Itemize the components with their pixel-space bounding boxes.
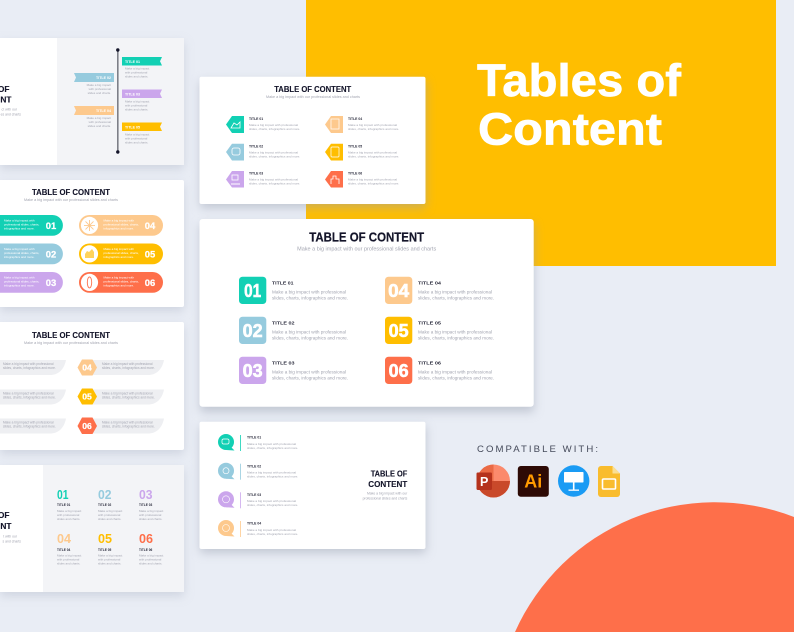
hexagon item 05: slides, charts, infographics and more.: [102, 396, 155, 400]
square item 04: slides, charts, infographics and more.: [418, 296, 494, 300]
hexagon item 04: slides, charts, infographics and more.: [102, 366, 155, 370]
square item 02: 02: [243, 321, 263, 341]
panel: pill slide: [0, 180, 184, 311]
pill 02: infographics and more.: [4, 255, 35, 259]
pill 04: [79, 215, 163, 236]
pill 05: Make a big impact with: [104, 247, 134, 251]
timeline item 04: with professional: [89, 120, 111, 124]
bubble item 03: slides, charts, infographics and more.: [247, 503, 298, 507]
pill 05: 05: [145, 248, 155, 260]
timeline item 04: TITLE 04: [96, 109, 111, 113]
pill 06: professional slides, charts,: [104, 280, 139, 284]
grid item 02: Make a big impact: [98, 509, 123, 513]
slide subtitle: Make a big impact with our professional slides and charts: [24, 198, 118, 202]
grid item 04: Make a big impact: [57, 554, 82, 558]
pill 05: professional slides, charts,: [104, 251, 139, 255]
slide title: CONTENT: [368, 479, 408, 489]
left bars: slides, charts, infographics and more.: [3, 396, 56, 400]
timeline item 01: [122, 57, 162, 78]
grid item 06: Make a big impact: [139, 554, 164, 558]
square item 05: 05: [389, 321, 409, 341]
compatible with label: COMPATIBLE WITH:: [477, 444, 598, 455]
timeline item 01: TITLE 01: [125, 60, 140, 64]
timeline item 04: [74, 106, 114, 128]
icon: Google Slides: [598, 466, 620, 497]
square item 06: [385, 357, 494, 384]
tag item 02: Make a big impact with professional: [249, 150, 298, 154]
panel: arrow tag slide: [200, 77, 426, 208]
slide title: TABLE OF CONTENT: [32, 330, 111, 340]
timeline item 03: with professional: [125, 104, 148, 108]
square item 06: TITLE 06: [418, 360, 441, 366]
tag item 04: TITLE 04: [348, 117, 362, 121]
slide subtitle: Make a big impact with our professional slides and charts: [297, 246, 437, 252]
left bars: Make a big impact with professional: [3, 362, 54, 366]
panel: speech bubble slide: [200, 422, 426, 553]
icon: Keynote: [558, 465, 589, 497]
slide subtitle: t with our: [3, 534, 18, 538]
hexagon item 06: [78, 418, 164, 434]
square item 06: slides, charts, infographics and more.: [418, 376, 494, 380]
slide subtitle: s and charts: [3, 540, 21, 544]
square item 03: Make a big impact with professional: [272, 369, 346, 374]
hexagon item 04: Make a big impact with professional: [102, 362, 153, 366]
square item 05: slides, charts, infographics and more.: [418, 336, 494, 340]
grid item 01: TITLE 01: [57, 503, 71, 507]
icon: Illustrator: [518, 466, 549, 497]
pill 03: infographics and more.: [4, 284, 35, 288]
grid item 03: TITLE 03: [139, 503, 153, 507]
tag item 03: slides, charts, infographics and more.: [249, 182, 300, 186]
grid item 06: [139, 531, 164, 566]
slide title: [368, 468, 408, 489]
yellow header block: [306, 0, 776, 266]
timeline item 02: Make a big impact: [87, 83, 111, 87]
square item 01: slides, charts, infographics and more.: [272, 296, 348, 300]
slide title: TABLE OF CONTENT: [274, 84, 352, 94]
pill 06: infographics and more.: [104, 284, 134, 288]
pill 05: [79, 244, 163, 264]
slide subtitle: Make a big impact with our professional slides and charts: [24, 341, 118, 345]
square item 05: Make a big impact with professional: [418, 329, 492, 334]
pill 02: Make a big impact with: [4, 247, 35, 251]
pill 06: Make a big impact with: [104, 276, 134, 280]
tag item 06: TITLE 06: [348, 172, 362, 176]
orange corner circle: [515, 502, 794, 632]
slide title: TABLE OF CONTENT: [32, 187, 111, 197]
square item 01: TITLE 01: [272, 280, 294, 286]
hexagon item 05: Make a big impact with professional: [102, 392, 153, 396]
icon: PowerPoint: [476, 464, 510, 498]
icon: PowerPoint: P: [480, 475, 488, 489]
tag item 02: TITLE 02: [249, 144, 263, 148]
slide title: [0, 84, 12, 104]
pill 01: [0, 215, 63, 236]
grid item 05: TITLE 05: [98, 548, 112, 552]
tag item 03: Make a big impact with professional: [249, 178, 298, 182]
square item 05: TITLE 05: [418, 320, 441, 326]
timeline item 02: with professional: [89, 87, 111, 91]
icon: Illustrator: Ai: [524, 472, 542, 492]
timeline item 02: [74, 73, 114, 95]
square item 02: TITLE 02: [272, 320, 295, 326]
grid item 04: TITLE 04: [57, 548, 71, 552]
hexagon item 06: slides, charts, infographics and more.: [102, 424, 155, 428]
grid item 05: slides and charts.: [98, 562, 122, 566]
grid item 03: with professional: [139, 513, 162, 517]
timeline item 03: [122, 90, 162, 112]
hexagon item 05: [78, 388, 164, 404]
left bars: slides, charts, infographics and more.: [3, 366, 56, 370]
slide title: NT: [0, 94, 12, 104]
grid item 02: TITLE 02: [98, 503, 112, 507]
grid item 02: 02: [98, 487, 112, 502]
grid item 01: [57, 487, 82, 521]
square item 01: 01: [244, 281, 261, 301]
square item 03: 03: [243, 361, 263, 381]
bubble item 02: Make a big impact with professional: [247, 470, 296, 474]
tag item 06: slides, charts, infographics and more.: [348, 182, 399, 186]
grid item 04: slides and charts.: [57, 562, 81, 566]
hexagon item 06: 06: [82, 421, 92, 431]
pill 04: infographics and more.: [104, 226, 134, 230]
timeline item 03: slides and charts.: [125, 108, 149, 112]
slide title: TABLE OF: [371, 468, 407, 478]
square item 04: Make a big impact with professional: [418, 289, 492, 294]
bubble item 01: [218, 434, 298, 451]
panel: numbers grid slide: [0, 465, 184, 596]
timeline axis: [116, 48, 120, 154]
bubble item 02: TITLE 02: [247, 464, 261, 468]
tag item 02: [226, 144, 300, 160]
pill 01: 01: [46, 220, 56, 231]
slide subtitle: Make a big impact with our professional slides and charts: [266, 95, 360, 99]
pill 02: [0, 244, 63, 264]
grid item 01: 01: [57, 487, 68, 502]
grid item 06: with professional: [139, 558, 162, 562]
grid item 05: Make a big impact: [98, 554, 123, 558]
left bars: slides, charts, infographics and more.: [3, 424, 56, 428]
grid item 02: [98, 487, 123, 521]
timeline item 05: slides and charts.: [125, 140, 149, 144]
pill 03: Make a big impact with: [4, 276, 35, 280]
tag item 01: TITLE 01: [249, 117, 263, 121]
slide subtitle: ct with our: [2, 108, 18, 112]
bubble item 04: Make a big impact with professional: [247, 528, 296, 532]
tag item 03: TITLE 03: [249, 172, 263, 176]
hexagon item 06: Make a big impact with professional: [102, 420, 153, 424]
grid item 04: [57, 531, 82, 566]
pill 04: professional slides, charts,: [104, 222, 139, 226]
slide title: NT: [0, 521, 12, 531]
square item 02: [239, 317, 348, 344]
grid item 05: with professional: [98, 558, 121, 562]
bubble item 04: slides, charts, infographics and more.: [247, 532, 298, 536]
main heading: Content: [478, 104, 662, 154]
tag item 01: Make a big impact with professional: [249, 123, 298, 127]
grid item 06: TITLE 06: [139, 548, 153, 552]
grid item 05: 05: [98, 531, 112, 546]
pill 01: Make a big impact with: [4, 218, 35, 222]
bubble item 03: TITLE 03: [247, 493, 261, 497]
bubble item 02: [218, 463, 298, 480]
pill 02: 02: [46, 248, 56, 260]
bubble item 03: Make a big impact with professional: [247, 499, 296, 503]
bubble item 03: [218, 491, 298, 508]
square item 01: [239, 277, 348, 304]
left bars: [0, 360, 66, 434]
timeline item 01: with professional: [125, 70, 148, 74]
square item 03: slides, charts, infographics and more.: [272, 376, 348, 380]
bubble item 04: TITLE 04: [247, 522, 261, 526]
pill 06: [79, 272, 163, 293]
left bars: Make a big impact with professional: [3, 392, 54, 396]
tag item 04: slides, charts, infographics and more.: [348, 127, 399, 131]
tag item 05: slides, charts, infographics and more.: [348, 154, 399, 158]
grid item 05: [98, 531, 123, 566]
slide subtitle: [363, 492, 408, 500]
slide title: [0, 510, 12, 531]
grid item 01: Make a big impact: [57, 509, 82, 513]
timeline item 02: slides and charts.: [88, 91, 111, 95]
panel: timeline slide: [0, 38, 184, 169]
bubble item 02: slides, charts, infographics and more.: [247, 474, 298, 478]
timeline item 05: [122, 122, 162, 144]
tag item 01: [226, 116, 300, 133]
tag item 02: slides, charts, infographics and more.: [249, 154, 300, 158]
grid item 01: slides and charts.: [57, 517, 81, 521]
pill 03: [0, 272, 63, 293]
grid item 02: slides and charts.: [98, 517, 122, 521]
tag item 04: [325, 116, 399, 133]
tag item 06: [325, 171, 399, 188]
square item 06: 06: [389, 361, 409, 381]
tag item 01: slides, charts, infographics and more.: [249, 127, 300, 131]
square item 05: [385, 317, 494, 344]
timeline item 04: Make a big impact: [87, 116, 111, 120]
grid item 03: [139, 487, 164, 521]
square item 03: [239, 357, 348, 384]
pill 05: infographics and more.: [104, 255, 134, 259]
timeline item 02: TITLE 02: [96, 76, 111, 80]
grid item 06: slides and charts.: [139, 562, 163, 566]
bubble item 01: slides, charts, infographics and more.: [247, 446, 298, 450]
timeline item 04: slides and charts.: [88, 124, 111, 128]
pill 01: infographics and more.: [4, 226, 35, 230]
timeline item 03: TITLE 03: [125, 92, 140, 96]
bubble item 04: [218, 520, 298, 537]
timeline item 01: slides and charts.: [125, 74, 149, 78]
slide subtitle: [3, 534, 21, 544]
pill 04: 04: [145, 220, 156, 231]
square item 04: TITLE 04: [418, 280, 441, 286]
square item 04: [385, 277, 494, 304]
main heading: Tables of: [477, 55, 682, 106]
timeline item 01: Make a big impact: [125, 66, 150, 70]
hexagon item 04: 04: [82, 362, 92, 372]
pill 03: professional slides, charts,: [4, 280, 40, 284]
bubble item 01: Make a big impact with professional: [247, 442, 296, 446]
left bars: Make a big impact with professional: [3, 420, 54, 424]
grid item 02: with professional: [98, 513, 121, 517]
tag item 04: Make a big impact with professional: [348, 123, 397, 127]
pill 04: Make a big impact with: [104, 218, 134, 222]
square item 02: slides, charts, infographics and more.: [272, 336, 348, 340]
tag item 06: Make a big impact with professional: [348, 178, 397, 182]
tag item 03: [226, 171, 300, 188]
pill 01: professional slides, charts,: [4, 222, 40, 226]
tag item 05: [325, 144, 399, 160]
square item 06: Make a big impact with professional: [418, 369, 492, 374]
grid item 03: Make a big impact: [139, 509, 164, 513]
grid item 06: 06: [139, 531, 153, 546]
grid item 04: with professional: [57, 558, 80, 562]
slide subtitle: Make a big impact with our: [367, 492, 408, 496]
timeline item 03: Make a big impact: [125, 100, 150, 104]
timeline item 05: TITLE 05: [125, 125, 140, 129]
square item 03: TITLE 03: [272, 360, 295, 366]
bubble item 01: TITLE 01: [247, 436, 261, 440]
hexagon item 05: 05: [82, 392, 92, 402]
timeline item 05: Make a big impact: [125, 132, 150, 136]
slide subtitle: professional slides and charts: [363, 496, 408, 500]
pill 03: 03: [46, 277, 56, 288]
panel: hexagon slide: [0, 322, 184, 454]
panel: numbered squares slide: [200, 219, 534, 412]
grid item 03: slides and charts.: [139, 517, 163, 521]
main heading: [477, 55, 682, 154]
hexagon item 04: [78, 360, 164, 376]
timeline item 05: with professional: [125, 136, 148, 140]
grid item 03: 03: [139, 487, 152, 502]
slide title: TABLE OF CONTENT: [309, 230, 424, 245]
slide subtitle: [1, 108, 21, 116]
slide subtitle: es and charts: [1, 112, 21, 116]
tag item 05: Make a big impact with professional: [348, 150, 397, 154]
tag item 05: TITLE 05: [348, 144, 362, 148]
pill 02: professional slides, charts,: [4, 251, 40, 255]
grid item 01: with professional: [57, 513, 80, 517]
grid item 04: 04: [57, 531, 72, 546]
pill 06: 06: [145, 277, 155, 288]
square item 02: Make a big impact with professional: [272, 329, 346, 334]
square item 01: Make a big impact with professional: [272, 289, 346, 294]
square item 04: 04: [388, 281, 409, 301]
